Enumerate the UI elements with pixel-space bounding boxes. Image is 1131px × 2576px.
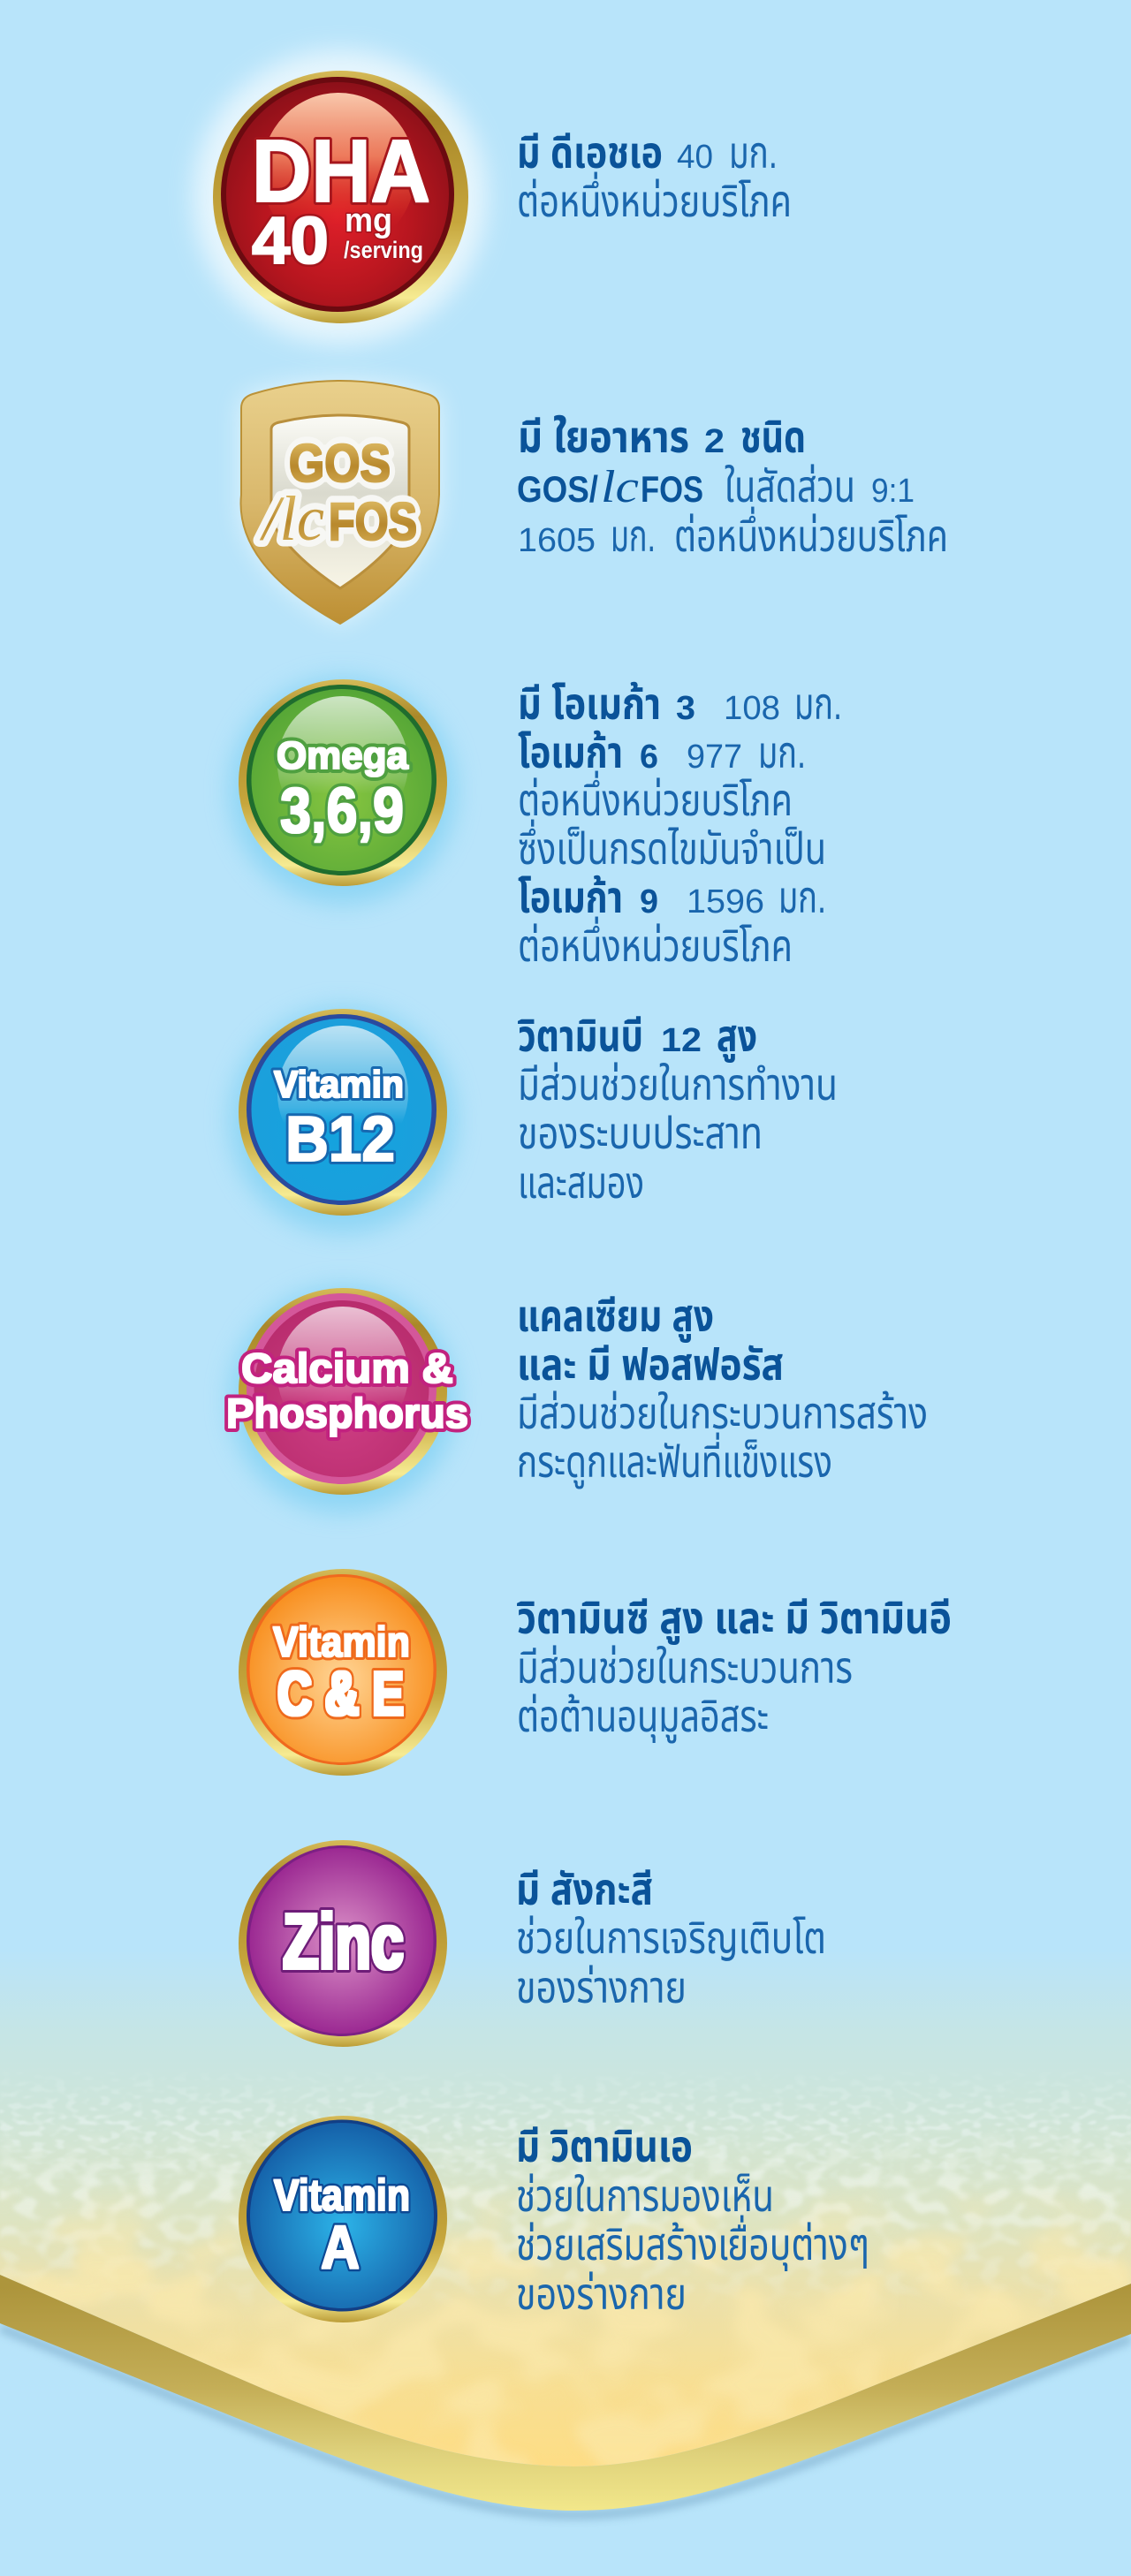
badge: GOS/lcFOS shield: /lc [259, 483, 324, 554]
text: Vitamin B12: สูง [717, 1011, 757, 1063]
text: Calcium and Phosphorus [517, 1292, 928, 1489]
text: Vitamin A: ช่วยในการมองเห็น [516, 2171, 774, 2221]
text: Vitamin A: มี วิตามินเอ [516, 2122, 693, 2171]
badge: Vitamin A: Vitamin [274, 2171, 410, 2220]
bottom golden sparkling base [0, 1952, 1131, 2515]
text: Zinc: มี สังกะสี [516, 1865, 653, 1914]
badge: GOS/lcFOS shield: GOS [289, 434, 391, 493]
text: fibre GOS/lcFOS: 1605 [518, 522, 596, 559]
text: fibre GOS/lcFOS: lc [601, 462, 639, 512]
text: Omega: มี โอเมก้า [518, 679, 661, 729]
text: Zinc [516, 1865, 826, 2012]
text: Vitamin B12: วิตามินบี [518, 1011, 643, 1061]
text: fibre GOS/lcFOS: ต่อหนึ่งหน่วยบริโภค [674, 506, 948, 561]
text: Omega: มก. [758, 728, 806, 777]
text: Vitamin B12: ของระบบประสาท [518, 1109, 763, 1158]
badge: DHA 40 mg per serving: mg [345, 202, 392, 239]
text: DHA: มี ดีเอชเอ [517, 128, 663, 178]
text: Zinc: ของร่างกาย [516, 1963, 687, 2012]
text: Vitamin C and E: วิตามินซี สูง และ มี วิตามินอี [517, 1594, 952, 1645]
text: DHA [517, 128, 792, 226]
badge: Vitamin A [239, 2116, 447, 2322]
badge: Vitamin A: A [321, 2213, 360, 2282]
text: Vitamin C and E [517, 1594, 952, 1743]
text: Omega: โอเมก้า [518, 873, 623, 922]
text: Omega: 1596 [687, 883, 764, 921]
text: Omega: ต่อหนึ่งหน่วยบริโภค [518, 916, 793, 971]
text: Vitamin C and E: มีส่วนช่วยในกระบวนการ [517, 1643, 853, 1693]
text: Vitamin B12 [518, 1011, 838, 1208]
text: Vitamin B12: และสมอง [518, 1158, 644, 1208]
text: Calcium and Phosphorus: กระดูกและฟันที่แข็งแรง [517, 1432, 832, 1489]
text: Omega: 108 [724, 690, 780, 727]
badge: Vitamin C and E: Vitamin [273, 1619, 410, 1666]
text: Zinc: ช่วยในการเจริญเติบโต [516, 1913, 826, 1963]
text: Calcium and Phosphorus: และ มี ฟอสฟอรัส [517, 1340, 784, 1390]
text: fibre GOS/lcFOS: มก. [611, 511, 656, 561]
badge: Omega 3,6,9: 3,6,9 [280, 776, 404, 846]
badge: DHA 40 mg per serving: /serving [344, 237, 423, 263]
text: Omega: มก. [794, 679, 842, 729]
text: fibre GOS/lcFOS: GOS/ [517, 468, 598, 510]
text: fibre GOS/lcFOS: 9:1 [871, 473, 915, 510]
badge: Vitamin C and E [239, 1569, 447, 1776]
text: Omega [518, 679, 842, 971]
text: Vitamin B12: มีส่วนช่วยในการทำงาน [518, 1060, 838, 1110]
badge: Vitamin B12: Vitamin [274, 1064, 404, 1106]
text: Omega: โอเมก้า [518, 728, 623, 777]
badge: Calcium and Phosphorus [226, 1286, 468, 1512]
text: Omega: 3 [676, 690, 695, 727]
text: fibre GOS/lcFOS: FOS [641, 468, 703, 510]
badge: Omega 3,6,9: Omega [277, 734, 409, 777]
badge: Calcium and Phosphorus: Phosphorus [226, 1390, 468, 1436]
badge: Zinc [239, 1840, 447, 2047]
badge: Omega 3,6,9 [230, 678, 456, 904]
text: Vitamin C and E: ต่อต้านอนุมูลอิสระ [517, 1692, 769, 1743]
badge: Vitamin B12: B12 [285, 1104, 395, 1175]
badge: GOS/lcFOS shield: FOS [329, 492, 417, 551]
text: fibre GOS/lcFOS: ชนิด [740, 413, 806, 462]
badge: Vitamin B12 [230, 1007, 456, 1233]
text: Omega: 977 [687, 739, 742, 776]
text: fibre GOS/lcFOS: มี ใยอาหาร [518, 413, 689, 462]
badge: Calcium and Phosphorus: Calcium & [241, 1345, 453, 1391]
text: fibre GOS/lcFOS: ในสัดส่วน [725, 462, 855, 511]
text: DHA: มก. [729, 128, 778, 178]
text: Omega: 6 [640, 739, 658, 776]
text: Omega: ซึ่งเป็นกรดไขมันจำเป็น [518, 819, 826, 874]
text: Vitamin A [516, 2122, 869, 2319]
badge: Zinc: Zinc [283, 1898, 404, 1985]
text: Vitamin B12: 12 [661, 1022, 702, 1059]
text: fibre GOS/lcFOS: 2 [704, 423, 725, 460]
badge: Vitamin C and E: C & E [277, 1659, 404, 1728]
text: Omega: มก. [778, 873, 826, 922]
badge: DHA 40 mg per serving [194, 50, 487, 344]
text: DHA: 40 [677, 139, 713, 176]
text: Calcium and Phosphorus: มีส่วนช่วยในกระบวนการสร้าง [517, 1389, 928, 1438]
text: DHA: ต่อหนึ่งหน่วยบริโภค [517, 171, 792, 226]
badge: DHA 40 mg per serving: DHA [252, 122, 430, 221]
text: Calcium and Phosphorus: แคลเซียม สูง [517, 1292, 714, 1343]
text: Vitamin A: ของร่างกาย [516, 2269, 687, 2319]
badge: GOS/lcFOS shield [240, 381, 439, 624]
badge: DHA 40 mg per serving: 40 [252, 203, 329, 277]
text: Omega: 9 [640, 883, 658, 921]
text: Vitamin A: ช่วยเสริมสร้างเยื่อบุต่างๆ [516, 2215, 869, 2271]
text: fibre GOS/lcFOS [517, 413, 948, 561]
text: Omega: ต่อหนึ่งหน่วยบริโภค [518, 770, 793, 825]
